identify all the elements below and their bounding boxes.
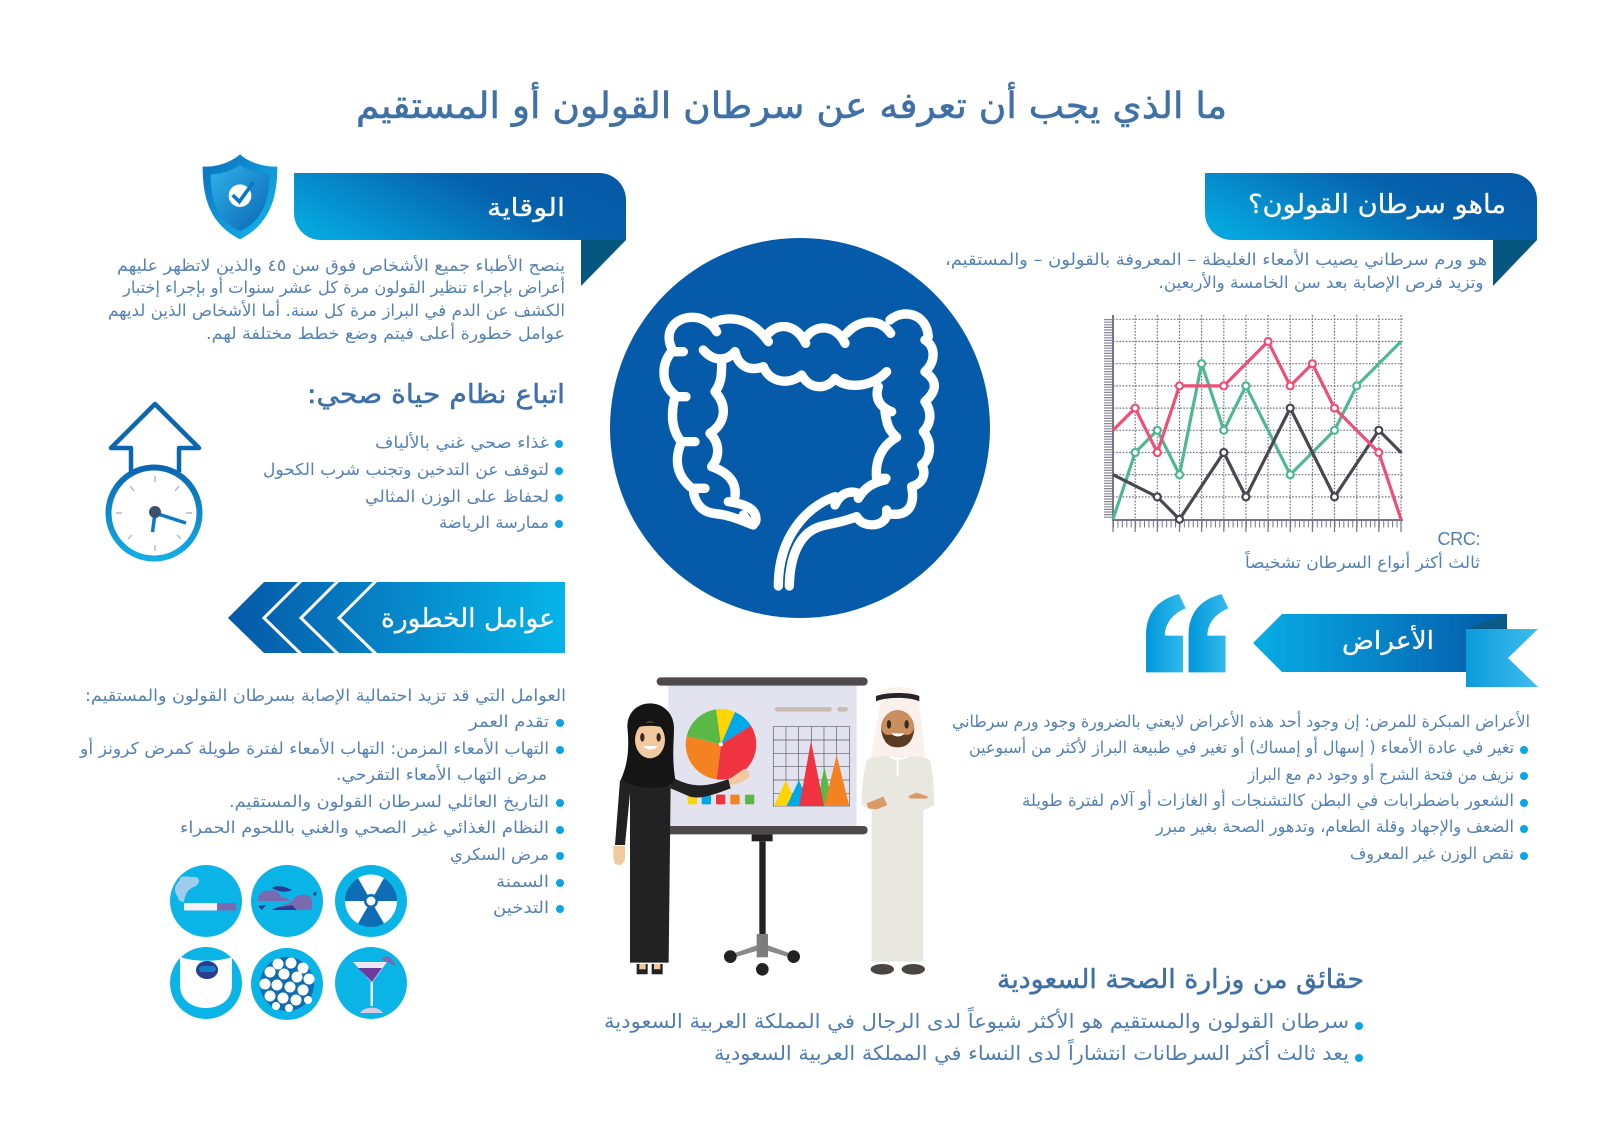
icon: clock with arrow (108, 404, 200, 558)
list: risk factors: العوامل التي قد تزيد احتمالية الإصابة بسرطان القولون والمستقيم: (85, 686, 566, 706)
icon: colon in blue circle (610, 238, 990, 618)
list: healthy lifestyle (263, 432, 563, 533)
text: definition: هو ورم سرطاني يصيب الأمعاء الغليظة – المعروفة بالقولون – والمستقيم، (945, 249, 1487, 270)
banner: prevention (294, 173, 626, 286)
series: green line (1113, 342, 1401, 519)
text: prevention paragraph: أعراض بإجراء تنظير القولون مرة كل عشر سنوات أو بإجراء إختبار (122, 276, 565, 298)
series: pink line (1113, 338, 1401, 519)
list: symptoms (952, 710, 1530, 864)
legend swatches (688, 795, 754, 804)
panel: ministry of health facts (604, 965, 1364, 1066)
man in thobe (862, 687, 934, 975)
chart caption (1244, 529, 1480, 573)
text: prevention paragraph: الكشف عن الدم في البراز مرة كل سنة. أما الأشخاص الذين لديهم (108, 299, 565, 321)
chart caption: CRC: (1438, 529, 1480, 549)
icon: shield (203, 154, 277, 239)
icon: cells (251, 948, 323, 1020)
banner: what is colon cancer: ماهو سرطان القولون؟ (1248, 190, 1506, 220)
list: healthy lifestyle: لحفاظ على الوزن المثالي (365, 487, 549, 507)
list: facts: سرطان القولون والمستقيم هو الأكثر شيوعاً لدى الرجال في المملكة العربية السعودية (604, 1007, 1349, 1034)
pie chart (686, 709, 756, 780)
woman presenter (613, 703, 750, 974)
list: symptoms: الأعراض المبكرة للمرض: إن وجود أحد هذه الأعراض لايعني بالضرورة وجود ورم سرطاني (952, 710, 1530, 732)
icon: clouds (251, 865, 323, 937)
list: risk factors: مرض السكري (450, 845, 549, 865)
text: definition: وتزيد فرص الإصابة بعد سن الخامسة والأربعين. (1158, 272, 1484, 293)
text: prevention paragraph (108, 255, 565, 344)
text: prevention paragraph: ينصح الأطباء جميع الأشخاص فوق سن ٤٥ والذين لاتظهر عليهم (117, 255, 565, 276)
list: risk factors: تقدم العمر (468, 712, 549, 732)
banner: risk factors: عوامل الخطورة (381, 604, 555, 634)
list: risk factors: السمنة (496, 872, 549, 891)
list: risk factors: التدخين (493, 898, 549, 917)
list: risk factors: مرض التهاب الأمعاء التقرحي. (336, 764, 547, 785)
list: healthy lifestyle: ممارسة الرياضة (439, 513, 549, 533)
icon: cocktail (335, 947, 407, 1019)
heading: facts: حقائق من وزارة الصحة السعودية (997, 965, 1364, 995)
list: facts: يعد ثالث أكثر السرطانات انتشاراً لدى النساء في المملكة العربية السعودية (714, 1039, 1349, 1066)
banner: prevention: الوقاية (487, 193, 565, 222)
icon: quote marks (1146, 594, 1228, 672)
list: risk factors: النظام الغذائي غير الصحي والغني باللحوم الحمراء (180, 818, 549, 838)
banner: risk factors (228, 580, 565, 655)
panel: risk factors (79, 580, 566, 1020)
line chart (1108, 315, 1403, 532)
icon: obesity (170, 947, 242, 1019)
panel: prevention (108, 154, 626, 558)
panel: symptoms (952, 594, 1538, 864)
area chart on board (773, 707, 850, 806)
list: symptoms: الشعور باضطرابات في البطن كالتشنجات أو الغازات أو آلام لفترة طويلة (1022, 789, 1514, 811)
list: facts (604, 1007, 1363, 1066)
banner: what is colon cancer (1205, 173, 1537, 286)
list: symptoms: الضعف والإجهاد وقلة الطعام، وتدهور الصحة بغير مبرر (1155, 817, 1514, 837)
banner: symptoms: الأعراض (1342, 624, 1434, 655)
series: dark line (1113, 405, 1401, 523)
presentation board (657, 677, 868, 976)
list: risk factors: التهاب الأمعاء المزمن: التهاب الأمعاء لفترة طويلة كمرض كرونز أو (79, 737, 549, 759)
list: risk factors: التاريخ العائلي لسرطان القولون والمستقيم. (229, 792, 549, 812)
list: healthy lifestyle: لتوقف عن التدخين وتجنب شرب الكحول (263, 460, 549, 480)
text: prevention paragraph: عوامل خطورة أعلى فيتم وضع خطط مختلفة لهم. (206, 322, 565, 344)
list: risk factors (79, 686, 566, 917)
title: ما الذي يجب أن تعرفه عن سرطان القولون أو المستقيم (356, 82, 1227, 127)
list: symptoms: نقص الوزن غير المعروف (1350, 844, 1514, 864)
list: symptoms: نزيف من فتحة الشرج أو وجود دم مع البراز (1247, 763, 1514, 785)
icon: cigarette (170, 865, 242, 937)
text: definition (945, 249, 1487, 293)
icon: radiation (335, 865, 407, 937)
banner: symptoms (1253, 614, 1538, 687)
chart caption: ثالث أكثر أنواع السرطان تشخيصاً (1244, 550, 1480, 573)
list: healthy lifestyle: غذاء صحي غني بالألياف (375, 432, 549, 453)
illustration: presenters with board (613, 677, 934, 976)
list: symptoms: تغير في عادة الأمعاء ( إسهال أو إمساك) أو تغير في طبيعة البراز لأكثر من أسبوعين (969, 736, 1514, 758)
heading: healthy lifestyle: اتباع نظام حياة صحي: (307, 380, 565, 410)
panel: what is colon cancer (945, 173, 1537, 573)
